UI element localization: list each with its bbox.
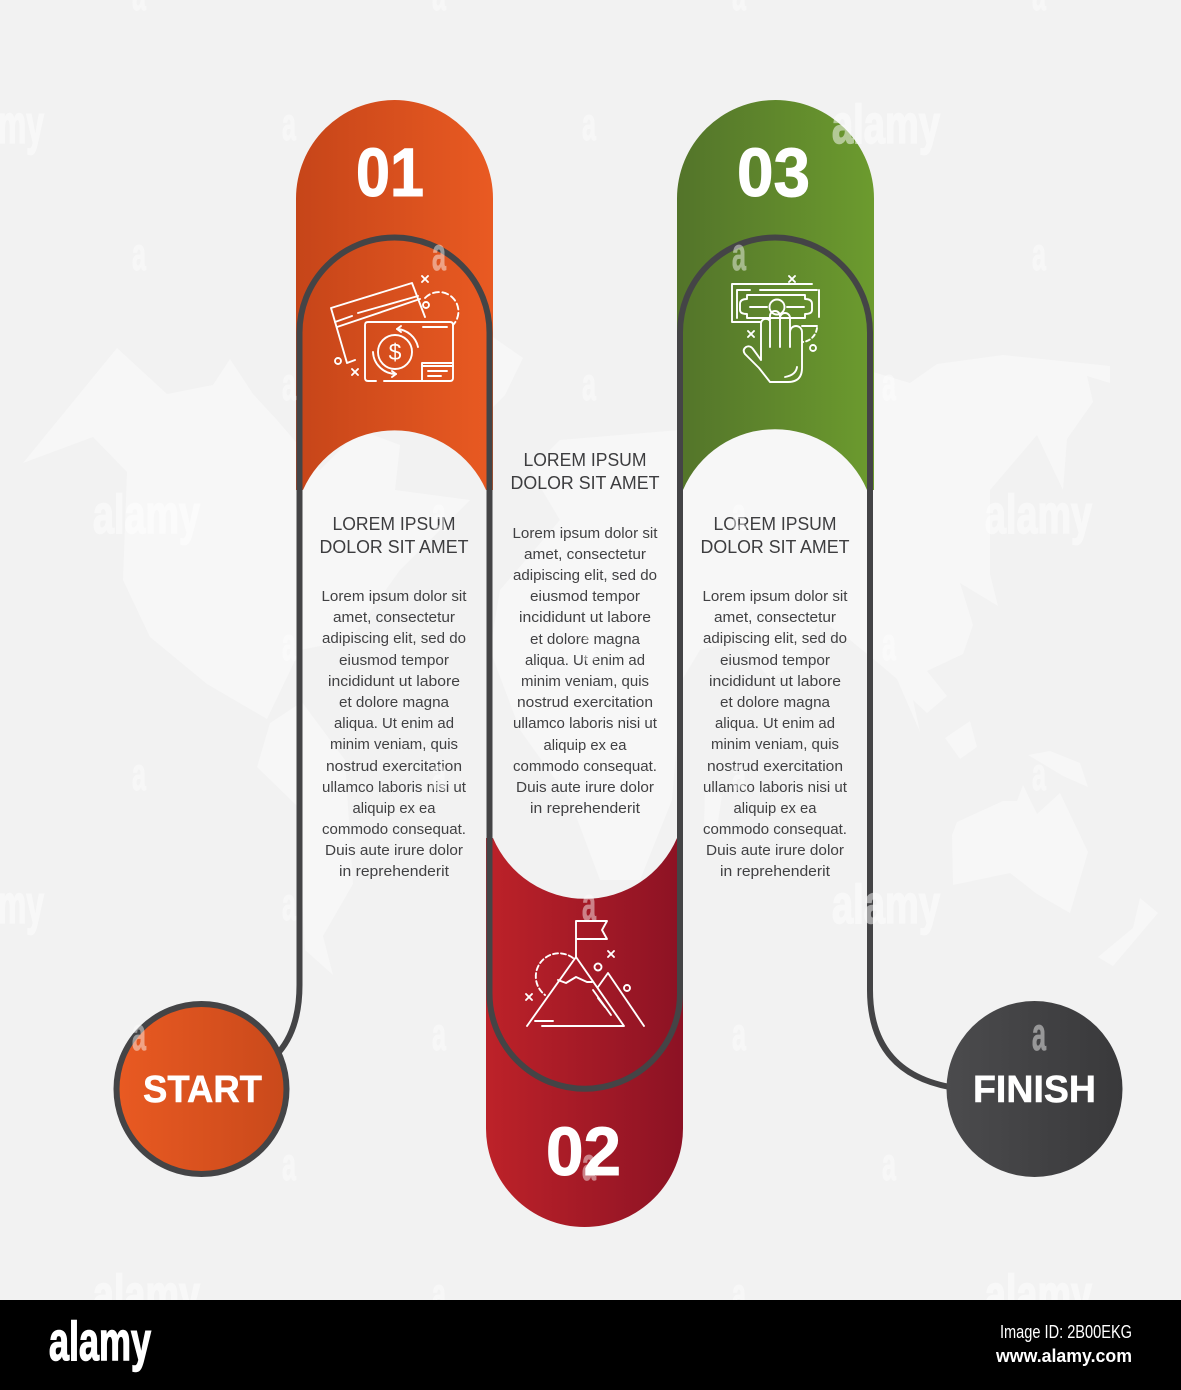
number 03: 03 — [737, 134, 810, 211]
text block: step 01: nostrud exercitation — [326, 759, 462, 775]
text block: step 03: Lorem ipsum dolor sit — [702, 589, 848, 605]
text block: step 02: nostrud exercitation — [517, 695, 653, 711]
text block: step 03: incididunt ut labore — [709, 674, 841, 690]
text block: step 02: amet, consectetur — [524, 547, 646, 563]
watermark: a — [732, 1008, 746, 1060]
watermark: a — [732, 1268, 746, 1320]
icon: credit card and money — [331, 276, 458, 381]
watermark: a — [582, 358, 596, 410]
text block: step 01: minim veniam, quis — [330, 737, 458, 753]
text block: step 03: eiusmod tempor — [720, 653, 830, 669]
watermark: a — [882, 1138, 896, 1190]
text block: step 03: aliqua. Ut enim ad — [715, 716, 835, 732]
watermark: my — [0, 93, 44, 155]
watermark: a — [1032, 228, 1046, 280]
watermark: alamy — [985, 1263, 1092, 1325]
finish badge — [946, 1001, 1122, 1177]
watermark: a — [732, 748, 746, 800]
world map backdrop — [23, 335, 1158, 975]
start badge: START — [143, 1069, 262, 1111]
text block: step 03: in reprehenderit — [720, 864, 830, 880]
text block: step 03: LOREM IPSUM — [714, 514, 836, 534]
text block: step 03: minim veniam, quis — [711, 737, 839, 753]
text block: step 03: Duis aute irure dolor — [706, 843, 844, 859]
number 02: 02 — [546, 1113, 621, 1190]
panel: step 01 coloured pill — [296, 100, 493, 490]
text block: step 01 — [320, 514, 468, 880]
watermark: alamy — [832, 93, 940, 155]
watermark: a — [882, 618, 896, 670]
text block: step 01: ullamco laboris nisi ut — [322, 780, 466, 796]
panel: step 02 coloured pill — [486, 838, 683, 1227]
finish badge: FINISH — [973, 1069, 1096, 1111]
text block: step 02: ullamco laboris nisi ut — [513, 716, 657, 732]
watermark: a — [282, 1138, 296, 1190]
watermark: a — [282, 358, 296, 410]
text block: step 02: et dolore magna — [530, 632, 641, 648]
watermark: a — [582, 878, 596, 930]
watermark: a — [432, 1008, 446, 1060]
text block: step 02: eiusmod tempor — [530, 589, 640, 605]
text block: step 02: DOLOR SIT AMET — [510, 473, 660, 493]
text block: step 02: adipiscing elit, sed do — [513, 568, 657, 584]
watermark: a — [432, 228, 446, 280]
footer bar: alamy — [49, 1310, 151, 1372]
number 01: 01 — [356, 134, 424, 211]
text block: step 01: Duis aute irure dolor — [325, 843, 463, 859]
watermark: a — [132, 228, 146, 280]
watermark: a — [132, 748, 146, 800]
text block: step 01: incididunt ut labore — [328, 674, 460, 690]
watermark: a — [582, 98, 596, 150]
text block: step 01: DOLOR SIT AMET — [320, 537, 468, 557]
text block: step 03: adipiscing elit, sed do — [703, 631, 847, 647]
watermark: a — [582, 1138, 596, 1190]
text block: step 03: DOLOR SIT AMET — [700, 537, 850, 557]
watermark: a — [882, 358, 896, 410]
start badge — [116, 1004, 286, 1174]
watermark: a — [732, 488, 746, 540]
text block: step 02: aliquip ex ea — [544, 738, 627, 754]
watermark: a — [282, 878, 296, 930]
watermark: my — [0, 873, 44, 935]
text block: step 02: Duis aute irure dolor — [516, 780, 654, 796]
text block: step 03: ullamco laboris nisi ut — [703, 780, 847, 796]
text block: step 02: incididunt ut labore — [519, 610, 651, 626]
icon: mountain with flag — [526, 921, 644, 1026]
watermark: alamy — [93, 483, 200, 545]
text block: step 03: commodo consequat. — [703, 822, 847, 838]
icon: hand on banknote — [732, 276, 819, 382]
footer bar: www.alamy.com — [995, 1346, 1132, 1366]
text block: step 01: in reprehenderit — [339, 864, 449, 880]
text block: step 01: aliquip ex ea — [352, 801, 436, 817]
text block: step 02: minim veniam, quis — [521, 674, 649, 690]
footer bar — [0, 1300, 1181, 1390]
watermark: a — [282, 98, 296, 150]
text block: step 03: amet, consectetur — [714, 610, 836, 626]
text block: step 03 — [700, 514, 850, 880]
text block: step 02: commodo consequat. — [513, 759, 657, 775]
text block: step 01: eiusmod tempor — [339, 653, 449, 669]
text block: step 02 — [510, 450, 660, 817]
text block: step 01: Lorem ipsum dolor sit — [322, 589, 466, 605]
text block: step 01: aliqua. Ut enim ad — [334, 716, 454, 732]
icon: credit card and money: $ — [389, 339, 402, 365]
text block: step 01: amet, consectetur — [333, 610, 455, 626]
connector line from start to finish — [279, 238, 950, 1089]
text block: step 01: commodo consequat. — [322, 822, 466, 838]
watermark: a — [582, 618, 596, 670]
text block: step 02: aliqua. Ut enim ad — [525, 653, 645, 669]
watermark: a — [432, 488, 446, 540]
watermark: a — [1032, 748, 1046, 800]
text block: step 02: LOREM IPSUM — [524, 450, 646, 470]
watermark: a — [132, 1008, 146, 1060]
watermark: alamy — [93, 1263, 200, 1325]
text block: step 02: in reprehenderit — [530, 801, 640, 817]
watermark: a — [432, 1268, 446, 1320]
text block: step 01: et dolore magna — [339, 695, 450, 711]
text block: step 01: LOREM IPSUM — [332, 514, 456, 534]
text block: step 03: nostrud exercitation — [707, 759, 843, 775]
watermark: a — [732, 228, 746, 280]
footer bar: Image ID: 2B00EKG — [1000, 1322, 1132, 1342]
text block: step 01: adipiscing elit, sed do — [322, 631, 466, 647]
text block: step 02: Lorem ipsum dolor sit — [512, 526, 658, 542]
watermark: a — [432, 748, 446, 800]
panel: step 03 coloured pill — [677, 100, 874, 490]
watermark: a — [282, 618, 296, 670]
text block: step 03: aliquip ex ea — [734, 801, 817, 817]
watermark: alamy — [832, 873, 940, 935]
watermark: a — [1032, 1008, 1046, 1060]
watermark: alamy — [985, 483, 1092, 545]
text block: step 03: et dolore magna — [720, 695, 831, 711]
